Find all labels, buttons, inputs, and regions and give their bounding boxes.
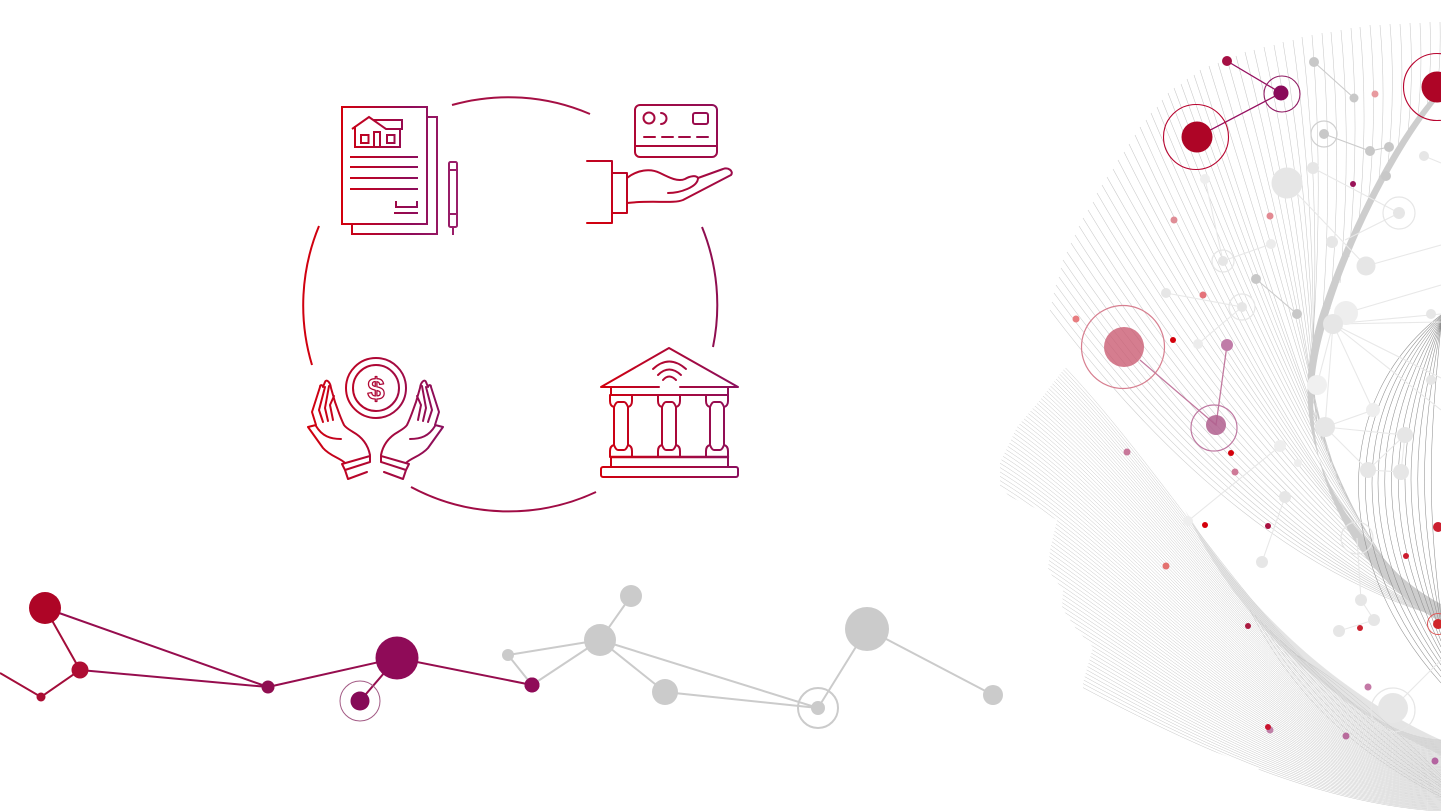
- face profile lines: [1000, 368, 1441, 811]
- arc: left: [303, 226, 319, 365]
- converging band of crown lines: [1307, 88, 1441, 622]
- faint grey nodes: [1161, 151, 1436, 723]
- mid grey network: [1251, 57, 1394, 319]
- cycle ring arcs: [303, 97, 717, 511]
- faint rings: [1212, 197, 1415, 732]
- icon: property document and pen: [342, 107, 457, 235]
- coloured network: pink cluster: [1082, 306, 1237, 451]
- arc: right: [702, 227, 717, 347]
- icon: bank with wireless signal: [601, 348, 738, 477]
- bottom network: coloured part: [0, 592, 540, 721]
- dollar sign: $: [367, 371, 385, 406]
- face band and crossing lines: [1185, 510, 1441, 797]
- fan of crown lines: [1050, 22, 1440, 617]
- bottom network: grey part: [502, 585, 1003, 728]
- dark inner contour lines: [1358, 315, 1441, 683]
- arc: top: [452, 97, 590, 114]
- left hand: [308, 381, 370, 479]
- icon: hands holding dollar coin: [308, 358, 443, 479]
- small coloured dots: [1072, 90, 1441, 764]
- arc: bottom: [411, 487, 596, 511]
- right hand: [381, 381, 443, 479]
- coloured network: upper cluster: [1164, 54, 1441, 170]
- icon: card over open hand: [587, 105, 732, 223]
- faint grey network: [1166, 156, 1441, 708]
- head illustration: [1000, 22, 1441, 811]
